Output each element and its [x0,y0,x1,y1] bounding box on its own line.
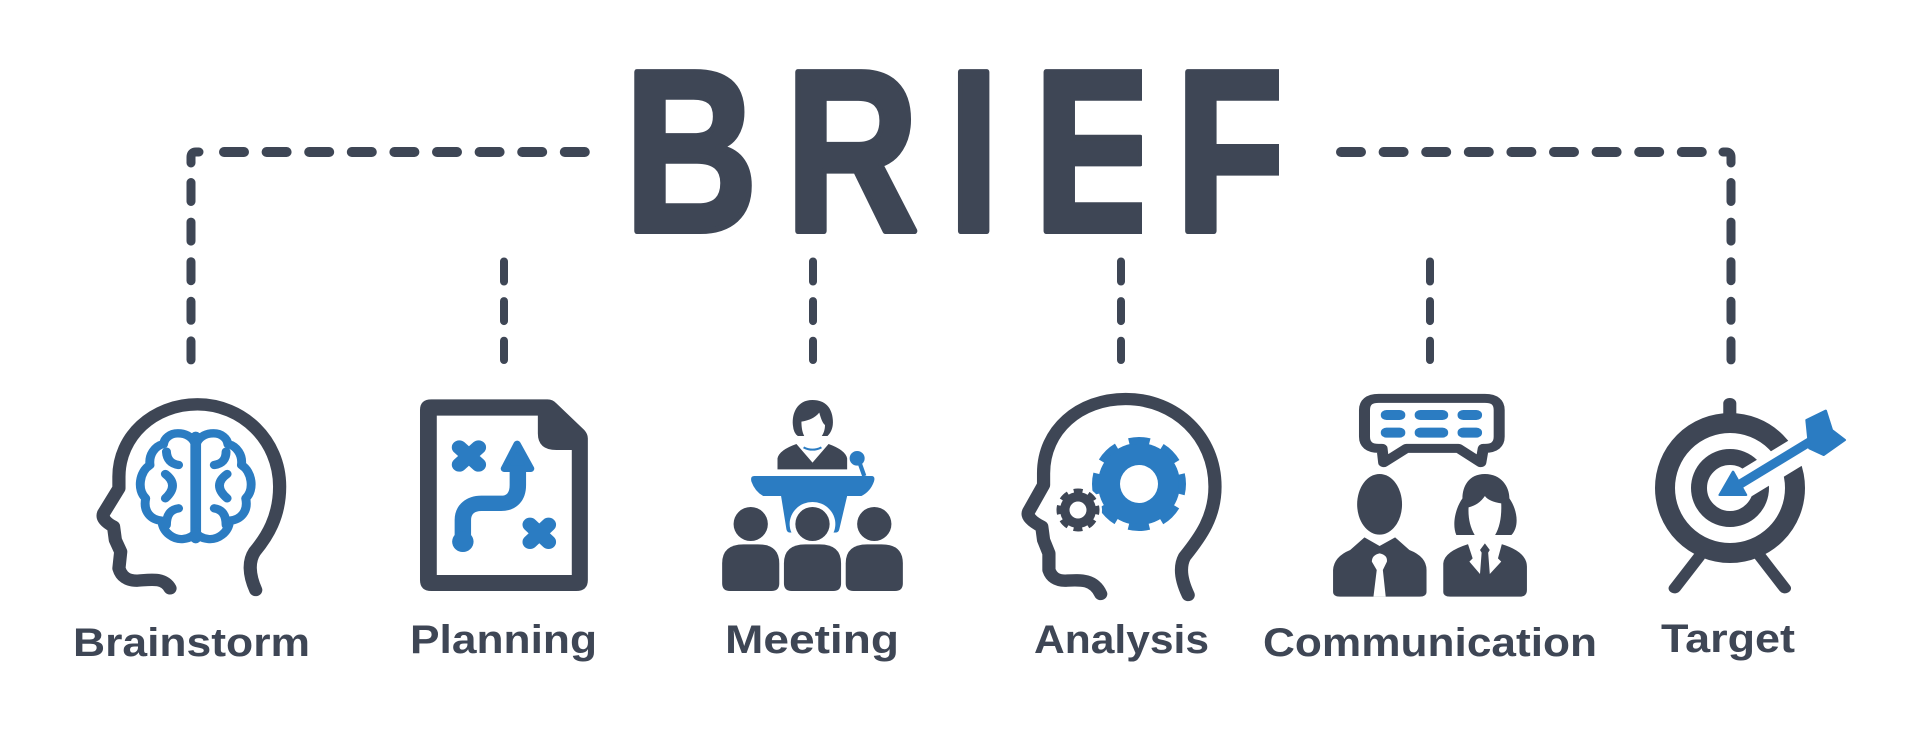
label: Meeting: Meeting [725,618,899,662]
label: Target: Target [1661,617,1795,661]
icon: communication speech bubble and two people [1333,398,1527,597]
icon: analysis head with gears [1028,399,1215,595]
label: Brainstorm: Brainstorm [73,621,310,665]
icon: meeting speaker and audience [722,400,903,591]
icon: target with arrow [1665,403,1845,588]
label: Communication: Communication [1263,621,1597,665]
icon: brainstorm head with brain [103,404,280,590]
label: Planning: Planning [410,618,597,662]
title: BRIEF [624,23,1288,281]
icon: planning document with route [420,399,588,591]
label: Analysis: Analysis [1034,618,1209,662]
connector: dashed lines from title to icons [191,152,1731,360]
